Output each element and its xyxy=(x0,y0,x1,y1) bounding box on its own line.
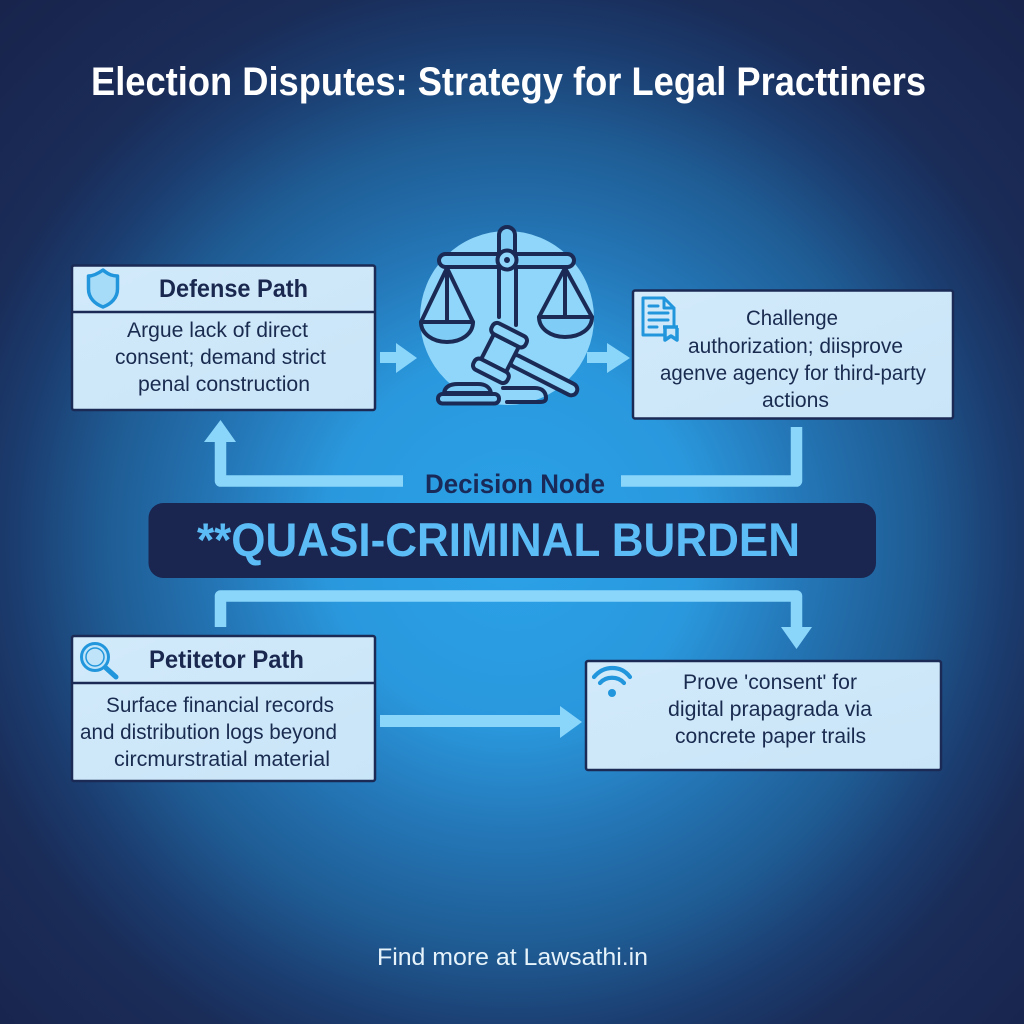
icon: document with ribbon xyxy=(643,298,678,340)
text: prove strategy: concrete paper trails xyxy=(675,725,866,748)
icon: wifi signal xyxy=(594,668,630,697)
text: challenge strategy: authorization; diisprove xyxy=(688,335,903,358)
text: defense strategy: Argue lack of direct xyxy=(127,319,308,342)
text: petitioner strategy: and distribution logs beyond xyxy=(80,721,337,744)
title: Election Disputes: Strategy for Legal Practtiners xyxy=(91,60,926,104)
footer: Find more at Lawsathi.in xyxy=(377,944,648,971)
banner: quasi-criminal burden: **QUASI-CRIMINAL BURDEN xyxy=(197,513,800,566)
arrow: defense path to scales xyxy=(380,343,417,373)
panel: petitetor path xyxy=(72,636,375,781)
icon: shield xyxy=(88,270,118,307)
text: defense strategy xyxy=(115,319,326,396)
arrow: petitetor path to prove box xyxy=(380,706,582,738)
heading: defense path: Defense Path xyxy=(159,275,308,303)
arrow: challenge box routed up to defense path xyxy=(220,427,796,481)
text: petitioner strategy: Surface financial records xyxy=(106,694,334,717)
text: prove strategy xyxy=(668,671,872,748)
text: petitioner strategy xyxy=(80,694,337,771)
arrowhead: up to defense path xyxy=(204,420,236,442)
text: challenge strategy: actions xyxy=(762,389,829,412)
text: prove strategy: Prove 'consent' for xyxy=(683,671,857,694)
text: prove strategy: digital prapagrada via xyxy=(668,698,872,721)
label: decision node: Decision Node xyxy=(425,469,605,499)
icon: magnifying glass xyxy=(82,644,116,677)
text: petitioner strategy: circmurstratial material xyxy=(114,748,330,771)
text: challenge strategy xyxy=(660,307,926,412)
text: challenge strategy: agenve agency for third-party xyxy=(660,362,926,385)
heading: petitetor path: Petitetor Path xyxy=(149,646,304,674)
text: defense strategy: penal construction xyxy=(138,373,310,396)
text: challenge strategy: Challenge xyxy=(746,307,838,330)
icon: scales of justice and gavel xyxy=(420,227,594,415)
banner: quasi-criminal burden xyxy=(148,503,876,578)
arrow: scales to challenge box xyxy=(587,343,630,373)
panel: prove consent xyxy=(586,661,941,770)
text: defense strategy: consent; demand strict xyxy=(115,346,326,369)
arrow: burden routed down to prove box xyxy=(220,596,812,649)
panel: challenge authorization xyxy=(633,290,953,418)
panel: defense path xyxy=(72,266,375,410)
